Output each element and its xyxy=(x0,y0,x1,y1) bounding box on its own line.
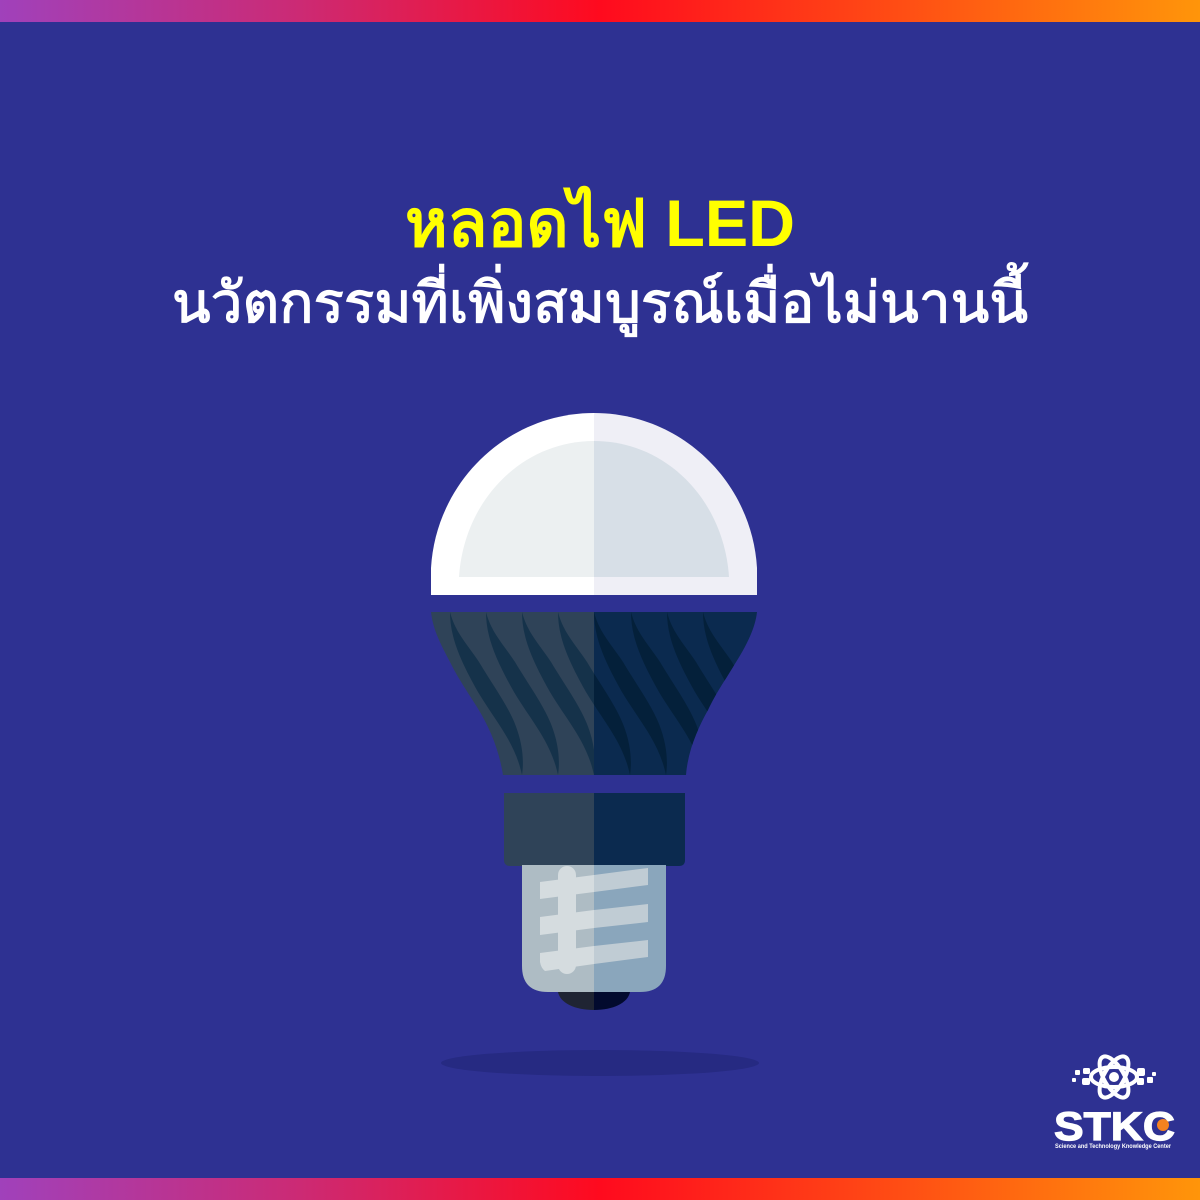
subheading: นวัตกรรมที่เพิ่งสมบูรณ์เมื่อไม่นานนี้ xyxy=(172,263,1028,337)
tip xyxy=(558,992,630,1010)
screw base xyxy=(522,865,666,992)
logo orange dot xyxy=(1157,1119,1169,1131)
bottom gradient bar xyxy=(0,1178,1200,1200)
screw threads xyxy=(540,866,648,974)
collar xyxy=(504,793,685,866)
title xyxy=(172,185,1028,337)
bulb dome xyxy=(431,413,757,595)
bulb ground shadow xyxy=(441,1050,759,1076)
heat sink with fins xyxy=(431,612,776,775)
top gradient bar xyxy=(0,0,1200,22)
logo atom mark xyxy=(1091,1052,1137,1102)
heading: LED bulb: หลอดไฟ LED xyxy=(405,185,795,260)
STKC logo xyxy=(1054,1052,1175,1150)
logo wordmark: STKC xyxy=(1054,1105,1175,1149)
icon: LED light bulb xyxy=(431,413,776,1010)
logo side dots xyxy=(1072,1068,1156,1085)
logo tagline: Science and Technology Knowledge Center xyxy=(1055,1144,1172,1150)
